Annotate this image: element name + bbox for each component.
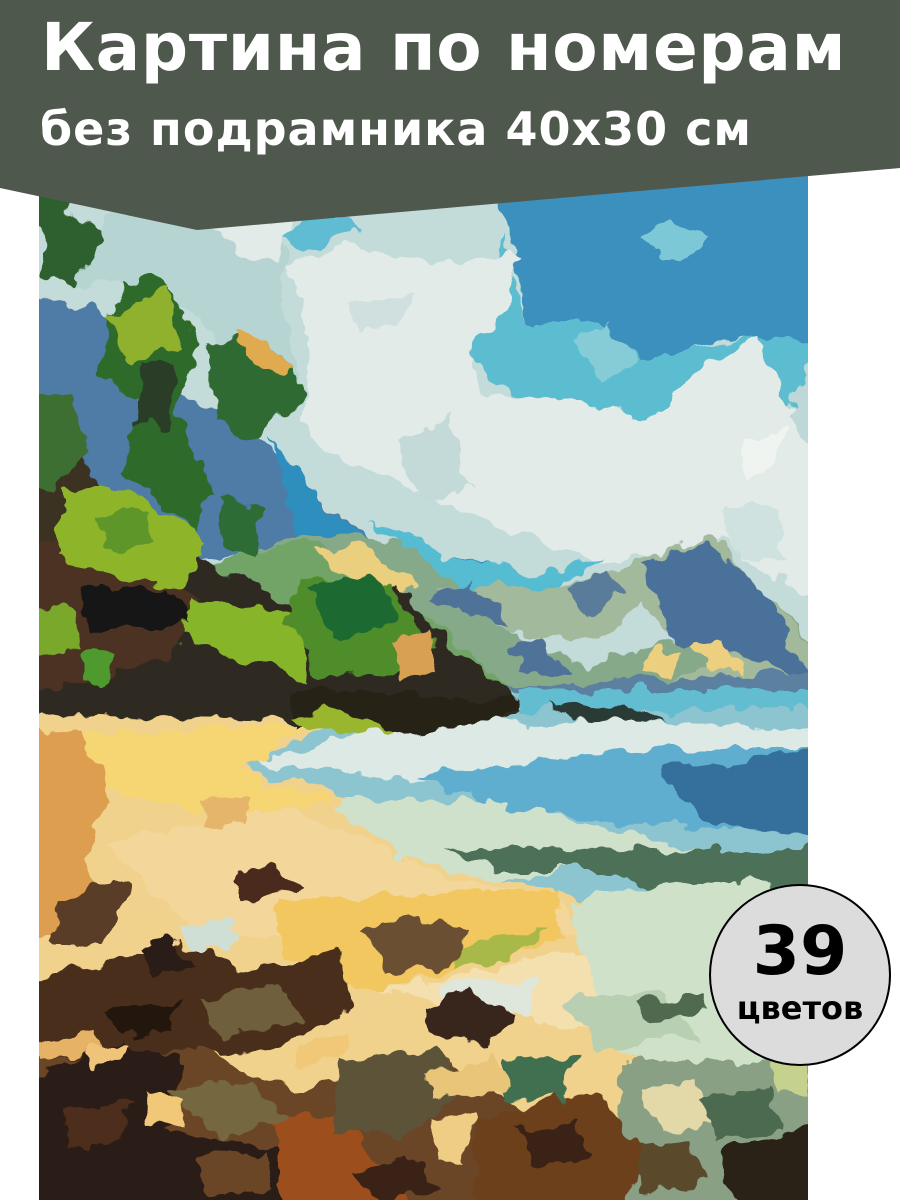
badge label: цветов bbox=[737, 989, 863, 1027]
subtitle: без подрамника 40х30 см bbox=[40, 102, 752, 156]
rocks bbox=[20, 865, 830, 1200]
green surf bbox=[440, 845, 830, 1200]
sea bbox=[235, 690, 830, 900]
title: Картина по номерам bbox=[41, 9, 846, 86]
header band bbox=[0, 0, 900, 230]
beach base bbox=[39, 712, 644, 1119]
painting: tropical beach bbox=[20, 160, 830, 1200]
trees and dark shoreline bbox=[20, 195, 520, 735]
sky bbox=[39, 176, 808, 672]
badge: 39 colours bbox=[709, 884, 891, 1066]
badge number: 39 bbox=[753, 912, 847, 991]
beach bbox=[20, 725, 620, 1040]
mountains bbox=[20, 295, 830, 700]
